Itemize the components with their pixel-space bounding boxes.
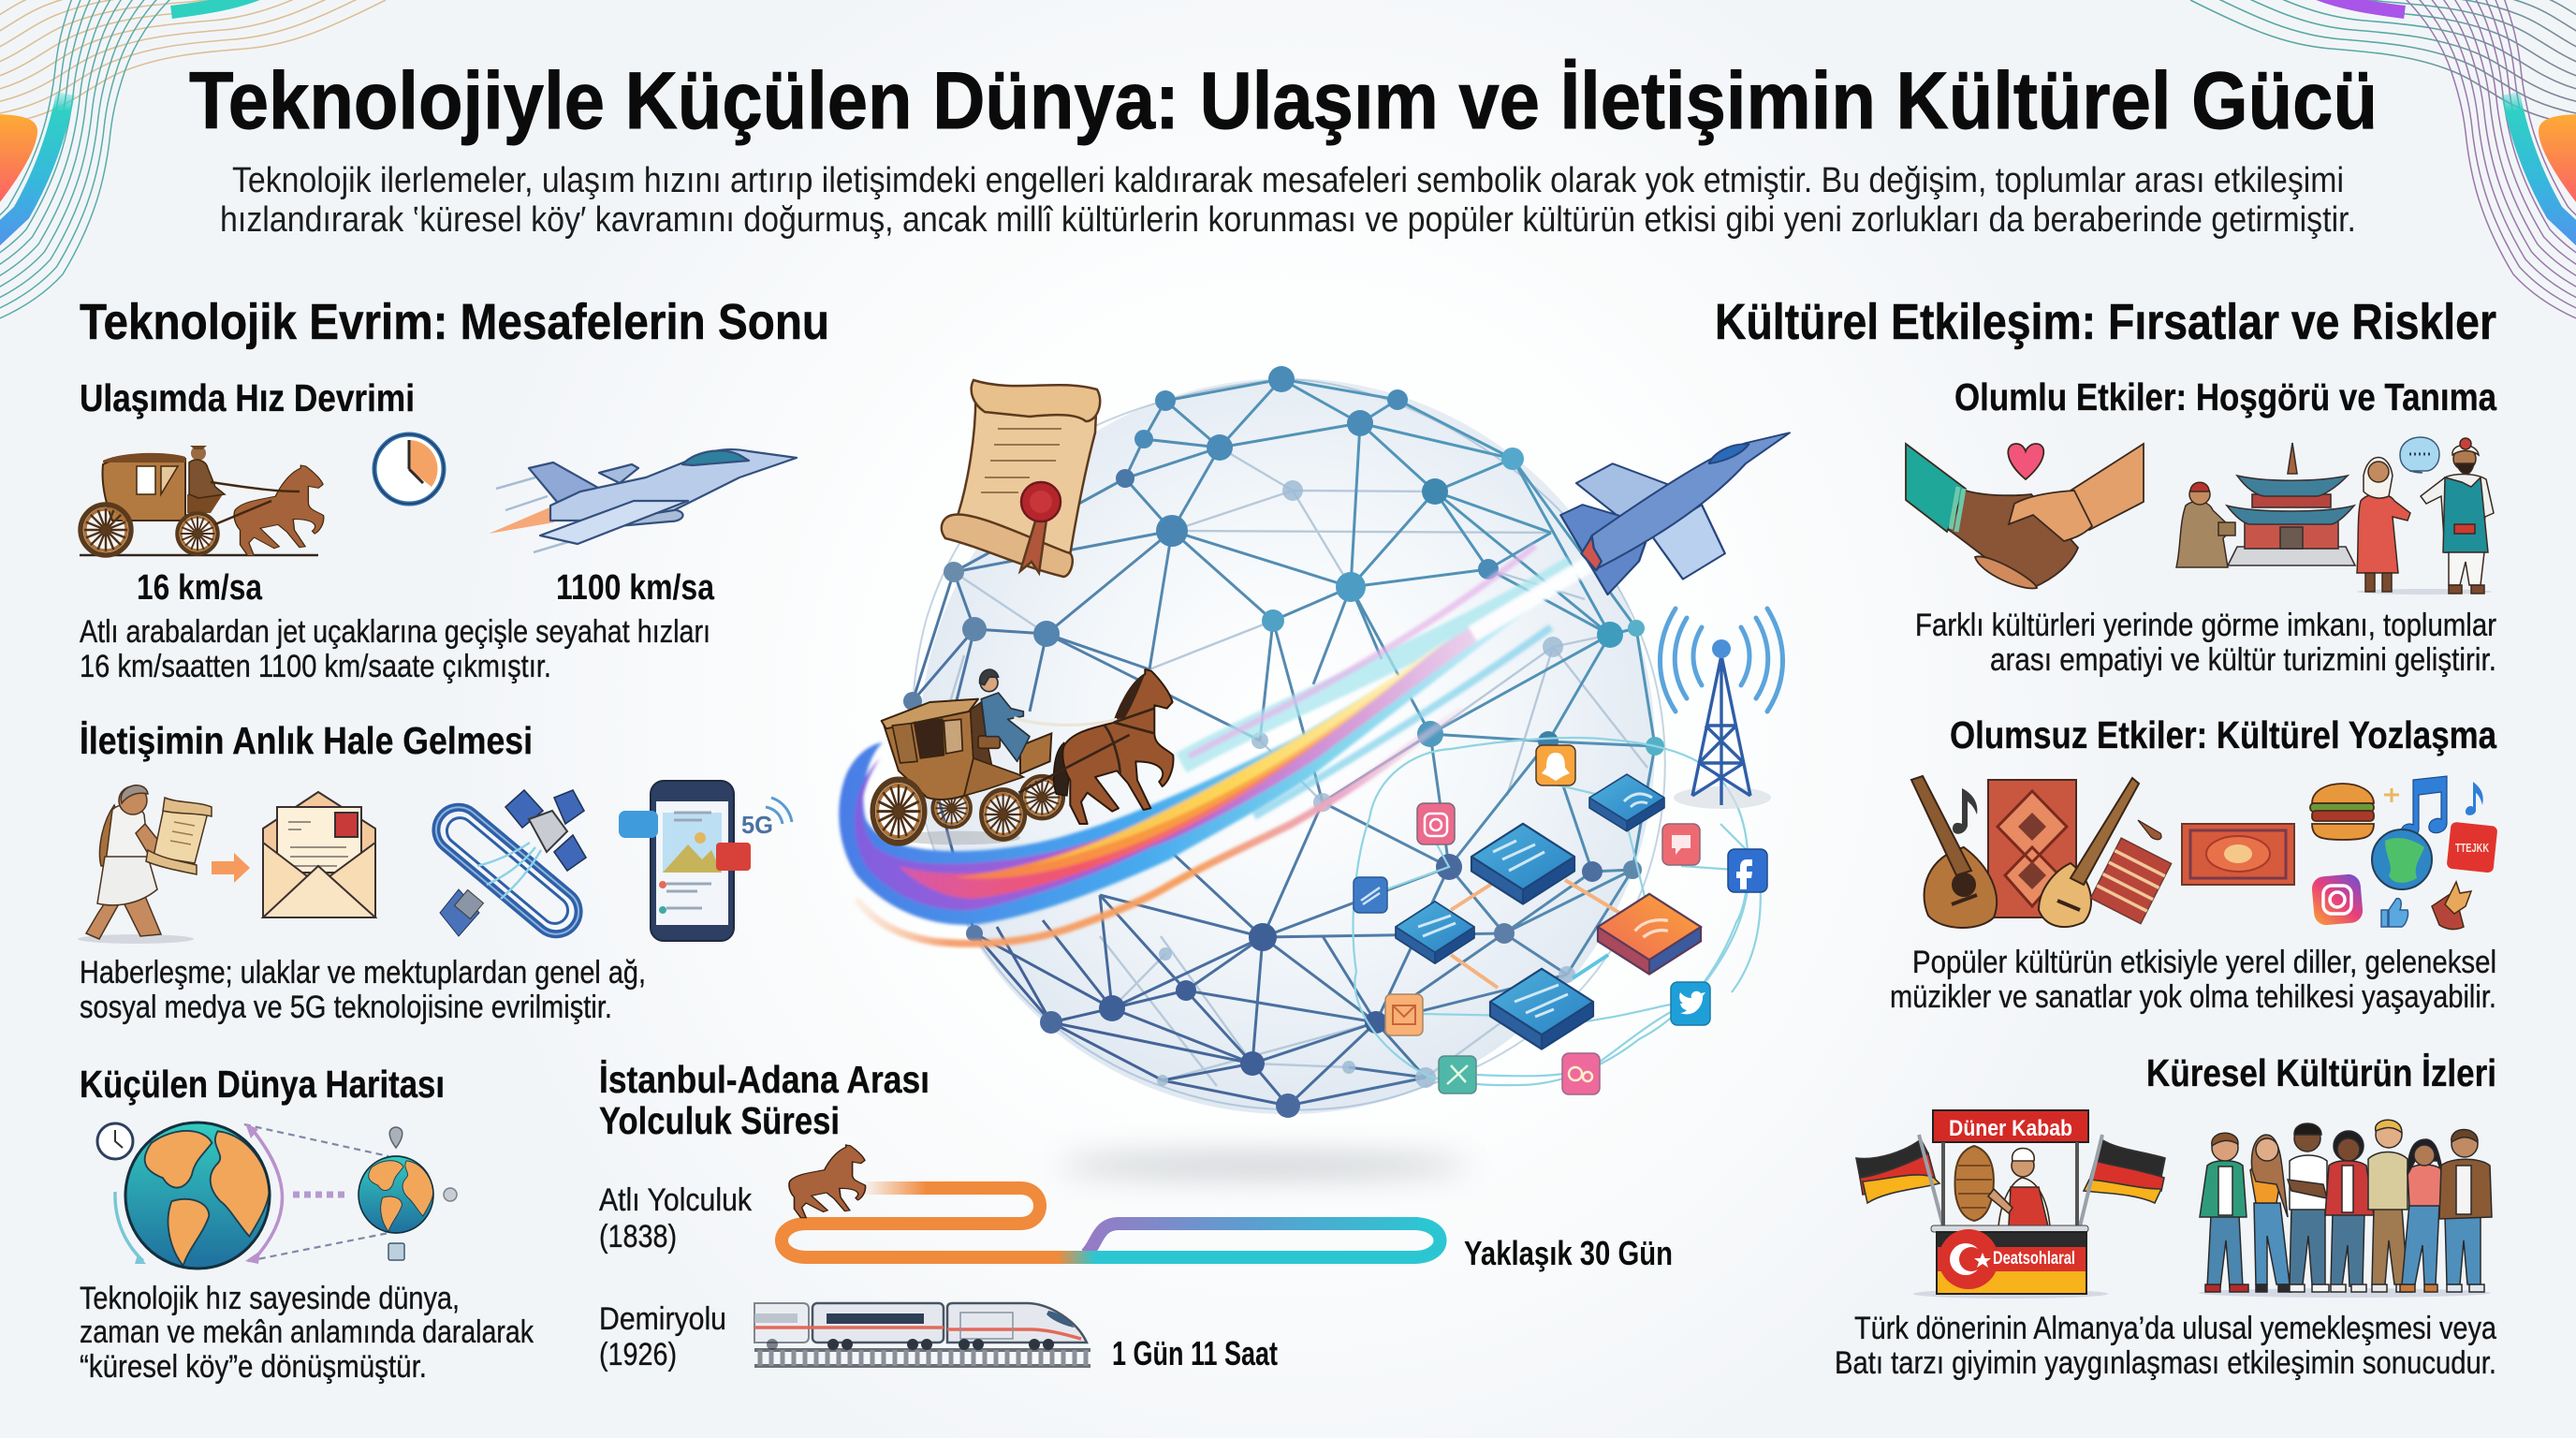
thin teal links xyxy=(1354,738,1761,1085)
person 3 xyxy=(2288,1123,2329,1292)
box glyphs xyxy=(1418,794,1652,1017)
description: Haberleşme; ulaklar ve mektuplardan genel ağ, xyxy=(80,955,646,990)
description: sosyal medya ve 5G teknolojisine evrilmiştir. xyxy=(80,990,612,1025)
central sphere shadow xyxy=(1058,1153,1470,1178)
label: duration: Yaklaşık 30 Gün xyxy=(1464,1234,1673,1272)
route: purple upper track xyxy=(1086,1224,1418,1255)
panel: positive effects xyxy=(1906,375,2497,678)
label: horse journey: (1838) xyxy=(599,1219,677,1255)
icon: wide carpet xyxy=(2182,824,2294,885)
red band xyxy=(899,674,1404,899)
icon: red tile: TTEJKK xyxy=(2455,841,2489,855)
location pin xyxy=(389,1127,402,1148)
figure: man with turban xyxy=(2421,438,2494,594)
heading: Yolculuk Süresi xyxy=(599,1099,840,1142)
heading: Küçülen Dünya Haritası xyxy=(80,1063,445,1106)
icon: train on rails xyxy=(754,1303,1090,1366)
description: Popüler kültürün etkisiyle yerel diller, geleneksel xyxy=(1912,945,2496,980)
decoration: top-left corner waves xyxy=(0,0,386,318)
icon: small kilim xyxy=(2090,838,2172,924)
icon: smartphone with social app xyxy=(619,781,792,941)
arrow xyxy=(1573,955,1608,978)
label: horse journey xyxy=(599,1182,753,1255)
icon: carriage xyxy=(80,446,324,556)
horse tail xyxy=(1054,742,1070,796)
icon: messenger with scroll xyxy=(78,785,212,944)
intro text xyxy=(220,161,2356,240)
central illustration: network globe xyxy=(903,366,1665,1118)
banner xyxy=(1933,1110,2088,1142)
data box orange xyxy=(1598,894,1701,975)
description xyxy=(80,1281,534,1385)
icon: handshake with heart xyxy=(1906,444,2144,589)
driver xyxy=(980,669,1030,761)
icon: red tile xyxy=(2447,822,2497,873)
data box small xyxy=(1396,902,1474,963)
speech bubble xyxy=(2400,437,2439,473)
central illustration: signal tower xyxy=(1661,609,1782,809)
data box large xyxy=(1471,824,1574,904)
shadow under carriage xyxy=(896,831,1020,844)
intro text: Teknolojik ilerlemeler, ulaşım hızını artırıp iletişimdeki engelleri kaldırarak mesafeleri sembolik olarak yok etmiştir. Bu değişim, toplumlar arası etkileşimi xyxy=(232,161,2344,200)
heading: Olumsuz Etkiler: Kültürel Yozlaşma xyxy=(1950,713,2497,756)
icon: music note xyxy=(1953,788,1977,834)
description xyxy=(1890,945,2496,1015)
icon: doner kiosk xyxy=(1856,1110,2165,1299)
description xyxy=(1835,1311,2496,1381)
person 1 xyxy=(2200,1133,2248,1292)
label: railway: Demiryolu xyxy=(599,1301,726,1337)
decoration: top-right corner waves xyxy=(2190,0,2576,318)
person 7 xyxy=(2439,1129,2492,1292)
camera marker xyxy=(388,1243,404,1260)
data box bottom xyxy=(1490,969,1593,1049)
doner spit xyxy=(1954,1146,1994,1221)
counter xyxy=(1931,1225,2088,1232)
target marker xyxy=(444,1188,457,1201)
description: Atlı arabalardan jet uçaklarına geçişle seyahat hızları xyxy=(80,614,710,650)
central illustration: horse carriage xyxy=(872,669,1174,844)
panel: shrinking world map xyxy=(80,1063,534,1385)
icon: doner kiosk: Düner Kabab xyxy=(1949,1116,2072,1141)
icon: saz xyxy=(2039,778,2139,927)
icon: doner kiosk: Deatsohlaral xyxy=(1993,1249,2075,1269)
icon: small mizrap xyxy=(2138,820,2161,840)
label: train duration: 1 Gün 11 Saat xyxy=(1112,1334,1278,1372)
person 4 xyxy=(2325,1131,2374,1292)
description: arası empatiyi ve kültür turizmini geliştirir. xyxy=(1990,642,2496,678)
app icon twitter xyxy=(1671,982,1710,1025)
icon: plus xyxy=(2384,788,2399,802)
arrow xyxy=(212,853,250,883)
heading: İstanbul-Adana Arası xyxy=(599,1058,929,1101)
heading: İletişimin Anlık Hale Gelmesi xyxy=(80,719,533,762)
icon: satellite and cables xyxy=(427,790,588,944)
signal waves xyxy=(1661,609,1782,712)
heading: Ulaşımda Hız Devrimi xyxy=(80,376,415,419)
speed value: jet: 1100 km/sa xyxy=(556,568,715,608)
central illustration: social network cluster xyxy=(1354,738,1767,1094)
description: zaman ve mekân anlamında daralarak xyxy=(80,1314,534,1350)
description: Teknolojik hız sayesinde dünya, xyxy=(80,1281,460,1316)
orange links xyxy=(1451,880,1619,988)
faint nodes xyxy=(1157,480,1575,1088)
5G label: 5G xyxy=(741,811,773,839)
icon: patterned rug xyxy=(1988,780,2076,917)
icon: festival hand xyxy=(2432,882,2471,930)
chart: big globe to small globe xyxy=(97,1123,457,1269)
app icon instagram xyxy=(1417,803,1455,844)
app icon chat xyxy=(1662,824,1700,865)
left heading: Teknolojik Evrim: Mesafelerin Sonu xyxy=(80,294,829,350)
intro text: hızlandırarak ‛küresel köy′ kavramını doğurmuş, ancak millî kültürlerin korunması ve popüler kültürün etkisi gibi yeni zorlukları da beraberinde getirmiştir. xyxy=(220,200,2356,240)
data box wifi xyxy=(1589,774,1664,831)
horse xyxy=(1062,669,1174,824)
icon: music notes blue xyxy=(2401,776,2447,839)
white exhaust beam xyxy=(1472,565,1588,634)
description: “küresel köy”e dönüşmüştür. xyxy=(80,1349,427,1385)
orange band xyxy=(955,660,1423,878)
icon: small note xyxy=(2466,782,2483,815)
icon: clock xyxy=(374,434,444,504)
big globe xyxy=(125,1123,270,1269)
central illustration: scroll with seal xyxy=(942,380,1100,577)
panel: traces of global culture xyxy=(1835,1051,2496,1381)
heading: Küresel Kültürün İzleri xyxy=(2146,1051,2496,1094)
icon: temple xyxy=(2227,443,2355,565)
small globe xyxy=(359,1156,433,1233)
figures: diverse group in western clothes xyxy=(2199,1120,2492,1298)
route: colour transition xyxy=(1058,1251,1100,1264)
chef xyxy=(1988,1148,2050,1226)
description xyxy=(80,955,646,1025)
back wheels xyxy=(932,789,971,828)
label: railway xyxy=(599,1301,726,1372)
central illustration: jet xyxy=(1560,433,1790,594)
app icon snapchat xyxy=(1536,745,1575,785)
icon: instagram xyxy=(2311,873,2364,926)
network lines xyxy=(913,379,1655,1106)
pink and cyan trailing strands xyxy=(1181,566,1573,763)
figure: kneeling man xyxy=(2176,482,2235,567)
figure: woman in red xyxy=(2357,457,2492,594)
icon: burger xyxy=(2310,784,2374,840)
app icon pink xyxy=(1562,1053,1600,1094)
person 2 xyxy=(2250,1135,2291,1292)
flag right xyxy=(2080,1135,2165,1226)
person 5 xyxy=(2368,1120,2411,1292)
app icon blue xyxy=(1354,877,1387,913)
faint back network lines xyxy=(936,448,1647,1086)
heading: Olumlu Etkiler: Hoşgörü ve Tanıma xyxy=(1954,375,2497,418)
icon: oud xyxy=(1911,776,1997,928)
heading xyxy=(599,1058,929,1142)
yellow band xyxy=(1030,637,1451,866)
flag left xyxy=(1856,1135,1943,1226)
label: railway: (1926) xyxy=(599,1337,677,1372)
app icon facebook xyxy=(1728,849,1767,892)
person 6 xyxy=(2400,1139,2445,1292)
icon: earth xyxy=(2372,829,2432,889)
front wheels xyxy=(872,780,925,843)
panel: transport speed xyxy=(80,376,797,684)
description: 16 km/saatten 1100 km/saate çıkmıştır. xyxy=(80,649,551,684)
lower orange strand xyxy=(858,712,1460,944)
carriage body xyxy=(883,709,973,800)
app icon mail xyxy=(1385,994,1423,1035)
panel: negative effects xyxy=(1890,713,2497,1015)
reins and shafts xyxy=(1014,718,1117,725)
title: Teknolojiyle Küçülen Dünya: Ulaşım ve İletişimin Kültürel Gücü xyxy=(189,56,2378,146)
icon: envelope xyxy=(263,792,375,917)
panel: instant communication xyxy=(78,719,792,1025)
description xyxy=(80,614,710,684)
purple band xyxy=(855,565,1582,910)
route: fading start xyxy=(861,1181,929,1195)
route: railway-era track xyxy=(1076,1224,1440,1257)
central illustration: speed ribbon xyxy=(839,546,1588,944)
description xyxy=(1915,608,2496,678)
app icon green xyxy=(1439,1056,1476,1093)
clock xyxy=(97,1123,133,1159)
outer sphere outline xyxy=(913,379,1665,1110)
icon: horse xyxy=(789,1145,866,1218)
icon: jet xyxy=(489,449,797,552)
icon: like xyxy=(2381,899,2408,927)
description: Farklı kültürleri yerinde görme imkanı, toplumlar xyxy=(1915,608,2496,643)
outer blue band xyxy=(839,562,1587,925)
speed value: carriage: 16 km/sa xyxy=(137,568,263,608)
network nodes xyxy=(903,366,1664,1118)
label: horse journey: Atlı Yolculuk xyxy=(599,1182,753,1218)
horse mane xyxy=(1116,674,1145,719)
route: orange track xyxy=(782,1188,1062,1257)
panel: Istanbul-Adana travel time xyxy=(599,1058,1673,1372)
